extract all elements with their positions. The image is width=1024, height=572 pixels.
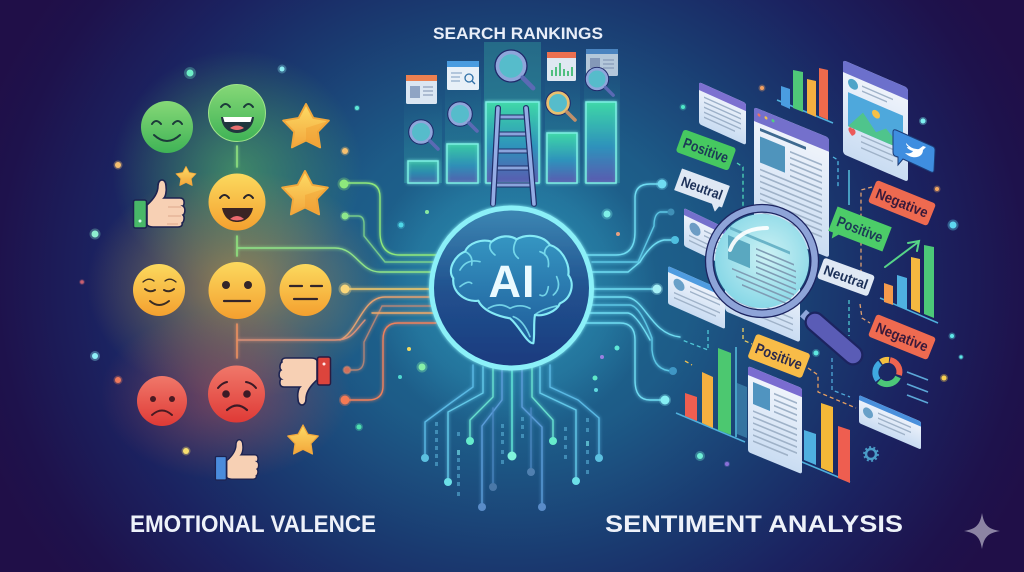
window: under magnifier xyxy=(725,250,800,342)
label: neutral white xyxy=(673,169,729,213)
magnifier xyxy=(706,204,853,355)
circuit lines: left, from emotions to AI xyxy=(237,146,440,400)
star: top right xyxy=(283,104,329,147)
mini windows xyxy=(406,49,618,104)
label: positive green: Positive xyxy=(681,135,731,167)
window: social post xyxy=(843,60,908,182)
bar chart lower left xyxy=(676,347,747,442)
emoji: green grin xyxy=(208,84,266,142)
magnifiers xyxy=(409,120,438,149)
circuit lines: right, from AI to sentiment xyxy=(586,184,680,400)
label: negative red: Negative xyxy=(873,186,930,222)
emotional glow background xyxy=(87,50,657,480)
data ticks under AI circuit xyxy=(435,417,589,496)
panel: sentiment analysis documents xyxy=(668,60,938,483)
lens xyxy=(715,214,809,308)
star: middle right xyxy=(282,171,328,214)
emoji: expressionless xyxy=(280,264,332,316)
label: positive green two xyxy=(826,206,892,257)
emoji: worried xyxy=(208,366,265,422)
window: main article xyxy=(754,107,829,258)
icon: thumbs up blue xyxy=(215,440,259,480)
dashed connectors xyxy=(682,157,872,408)
window: lower right xyxy=(859,395,921,450)
bar chart lower center xyxy=(790,403,850,483)
panel: search rankings chart xyxy=(395,42,628,204)
label: negative two: Negative xyxy=(873,320,930,356)
icon: brain xyxy=(451,236,572,343)
bars xyxy=(408,102,616,183)
donut chart xyxy=(875,360,899,384)
icon: sparkle xyxy=(964,513,1000,549)
star: small xyxy=(176,166,196,185)
glow columns xyxy=(404,42,620,183)
label: neutral two: Neutral xyxy=(822,262,870,292)
label: positive yellow: Positive xyxy=(753,340,805,374)
icon: thumbs down red xyxy=(279,357,330,405)
AI core circle xyxy=(432,208,592,368)
window: low left xyxy=(668,266,725,329)
floating glowing dots xyxy=(80,66,963,466)
emoji: green smile xyxy=(141,101,193,153)
small bar chart with arrow xyxy=(880,241,938,323)
baseline xyxy=(395,182,628,184)
label: positive green two: Positive xyxy=(834,213,885,246)
window: lower article xyxy=(748,366,802,474)
text: AI: AI xyxy=(488,256,536,307)
heading: Emotional Valence: EMOTIONAL VALENCE xyxy=(130,511,376,538)
circuit end nodes xyxy=(340,180,679,511)
handle xyxy=(803,313,814,323)
heading: Sentiment Analysis: SENTIMENT ANALYSIS xyxy=(605,511,903,538)
emoji: neutral xyxy=(208,262,266,319)
star: low xyxy=(288,425,318,454)
label: neutral white: Neutral xyxy=(679,173,725,203)
emoji: yellow grin xyxy=(208,174,266,230)
legend lines xyxy=(907,372,928,403)
icon: gear xyxy=(864,447,878,461)
icon: thumbs up green xyxy=(134,180,185,228)
heading: Search Rankings: SEARCH RANKINGS xyxy=(433,24,603,43)
emoji: content calm xyxy=(133,264,185,316)
emoji: frown xyxy=(137,376,187,426)
window: top left xyxy=(699,82,746,145)
icon: twitter bubble xyxy=(893,130,935,172)
top bar chart xyxy=(777,68,833,123)
window: mid left xyxy=(684,208,726,266)
circuit lines: bottom xyxy=(425,365,599,507)
ladder xyxy=(493,108,534,204)
